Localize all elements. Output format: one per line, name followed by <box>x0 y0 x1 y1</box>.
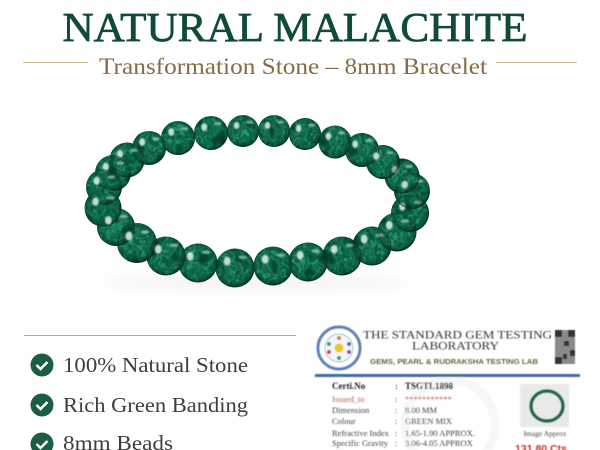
certificate: GEMS, PEARL & RUDRAKSHA TESTING LAB <box>370 357 539 366</box>
certificate details: : <box>395 394 397 404</box>
certificate details: : <box>395 438 397 448</box>
certificate details: GREEN MIX <box>405 416 452 426</box>
title: NATURAL MALACHITE <box>62 4 528 50</box>
certificate details: : <box>395 381 398 391</box>
certificate <box>315 327 580 450</box>
certificate details: TSGTL1898 <box>405 381 454 391</box>
certificate details: Dimension <box>332 405 370 415</box>
thumbnail caption: Image Approx <box>523 429 567 438</box>
certificate details <box>332 381 475 448</box>
certificate details: 1.65-1.90 APPROX. <box>405 428 475 438</box>
feature list <box>30 353 249 450</box>
certificate heading: THE STANDARD GEM TESTING <box>363 328 552 342</box>
bracelet photo <box>84 115 430 290</box>
subtitle: Transformation Stone – 8mm Bracelet <box>99 54 488 79</box>
certificate details: Issued_to <box>332 394 365 404</box>
QR code <box>555 330 575 364</box>
certificate details: Certi.No <box>332 381 366 391</box>
certificate details: : <box>395 428 397 438</box>
certificate details: 8.00 MM <box>405 405 438 415</box>
feature: banding: Rich Green Banding <box>63 393 249 417</box>
certificate details: Colour <box>332 416 356 426</box>
certificate details: Refractive Index <box>332 428 390 438</box>
certificate details: Specific Gravity <box>332 438 389 448</box>
feature: natural stone: 100% Natural Stone <box>63 353 248 377</box>
certificate: LABORATORY <box>412 338 499 352</box>
certificate details: 3.06-4.05 APPROX <box>405 438 473 448</box>
certificate seal <box>318 327 360 369</box>
certificate details: : <box>395 405 397 415</box>
watermark <box>405 380 495 450</box>
certificate details: : <box>395 416 397 426</box>
certificate thumbnail <box>520 384 569 427</box>
certificate blue bar <box>315 374 580 377</box>
divider <box>24 334 296 336</box>
certificate details: *********** <box>405 394 452 404</box>
